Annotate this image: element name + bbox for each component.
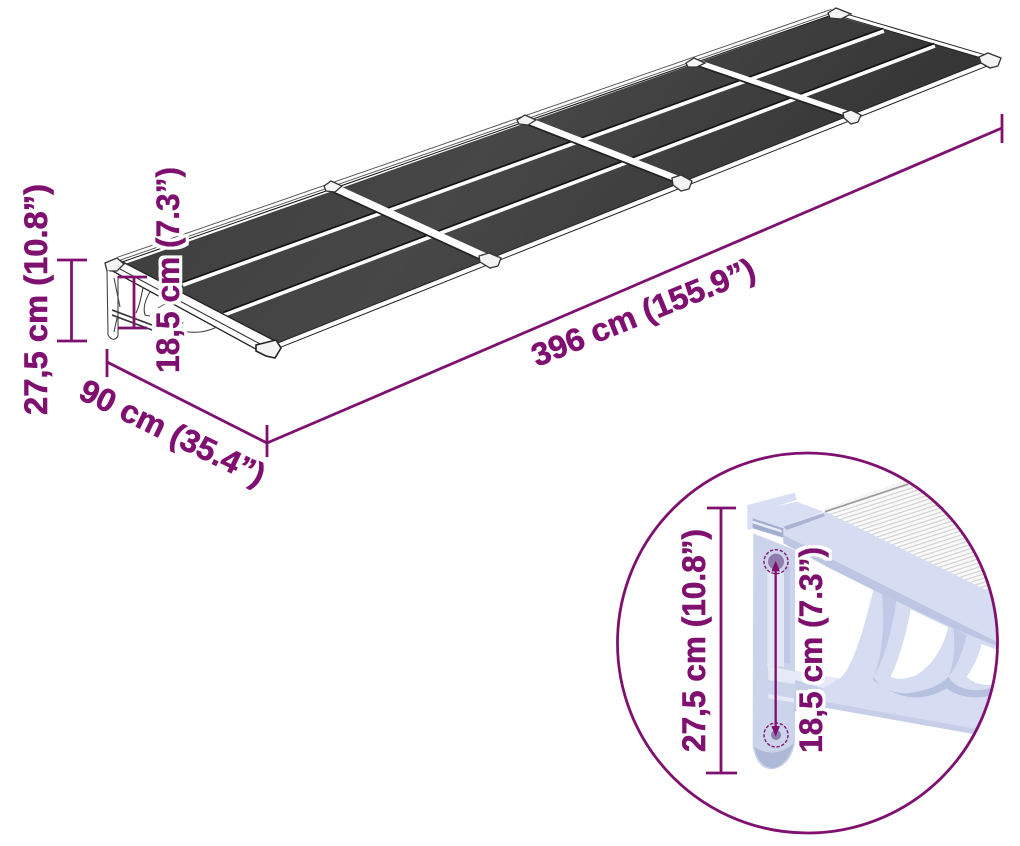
inset dimension line (706, 508, 737, 773)
screw hole bottom (771, 730, 781, 740)
screw hole top (768, 554, 784, 570)
panel top edge (825, 484, 908, 512)
inset circle outline (618, 453, 998, 833)
top clamp (747, 493, 823, 538)
corner blocks (324, 8, 1001, 268)
long glazing stripes (183, 30, 935, 315)
truss arm (795, 590, 996, 728)
front edge rail (272, 63, 988, 348)
cross bars (333, 62, 852, 260)
dashed ring bottom (764, 723, 788, 747)
label: 18,5 cm: 18,5 cm (7.3”) (150, 167, 186, 373)
dark polycarbonate panel (122, 15, 990, 346)
inset bracket drawing (747, 480, 1007, 769)
dimension: hole spacing (118, 277, 147, 328)
dashed ring top (764, 550, 788, 574)
detail inset (618, 453, 1007, 833)
label: 27,5 cm: 27,5 cm (10.8”) (18, 184, 54, 415)
dimension: width line (267, 114, 1002, 443)
hatched panel (830, 485, 988, 590)
plate inner channel (767, 570, 784, 667)
rail underside (783, 533, 1007, 650)
front-left corner block (256, 340, 281, 358)
rib shading (873, 677, 1003, 697)
back-left corner block (105, 258, 124, 271)
top rail (783, 512, 1007, 647)
truss hole 1 (891, 609, 948, 679)
left end rail (107, 259, 277, 353)
arrow between holes (771, 561, 780, 737)
plate lower shade (754, 743, 794, 768)
truss hole 2 (966, 644, 996, 685)
wall plate (753, 533, 795, 769)
truss lower shade (824, 702, 976, 734)
label: 396 cm: 396 cm (155.9”) (526, 251, 760, 373)
horizontal arm ribs (768, 666, 840, 688)
inset label: 18,5 cm: 18,5 cm (7.3”) (793, 547, 829, 753)
right end rail (836, 13, 992, 59)
label: 90 cm: 90 cm (35.4”) (74, 372, 271, 493)
dimension: depth line (107, 349, 267, 457)
inset label: 27,5 cm: 27,5 cm (10.8”) (676, 529, 712, 752)
panel top highlight (825, 481, 920, 512)
dimension: overall bracket height (57, 260, 87, 341)
small wall bracket (107, 270, 217, 339)
back edge rail (118, 11, 832, 262)
canopy illustration (105, 8, 1001, 358)
